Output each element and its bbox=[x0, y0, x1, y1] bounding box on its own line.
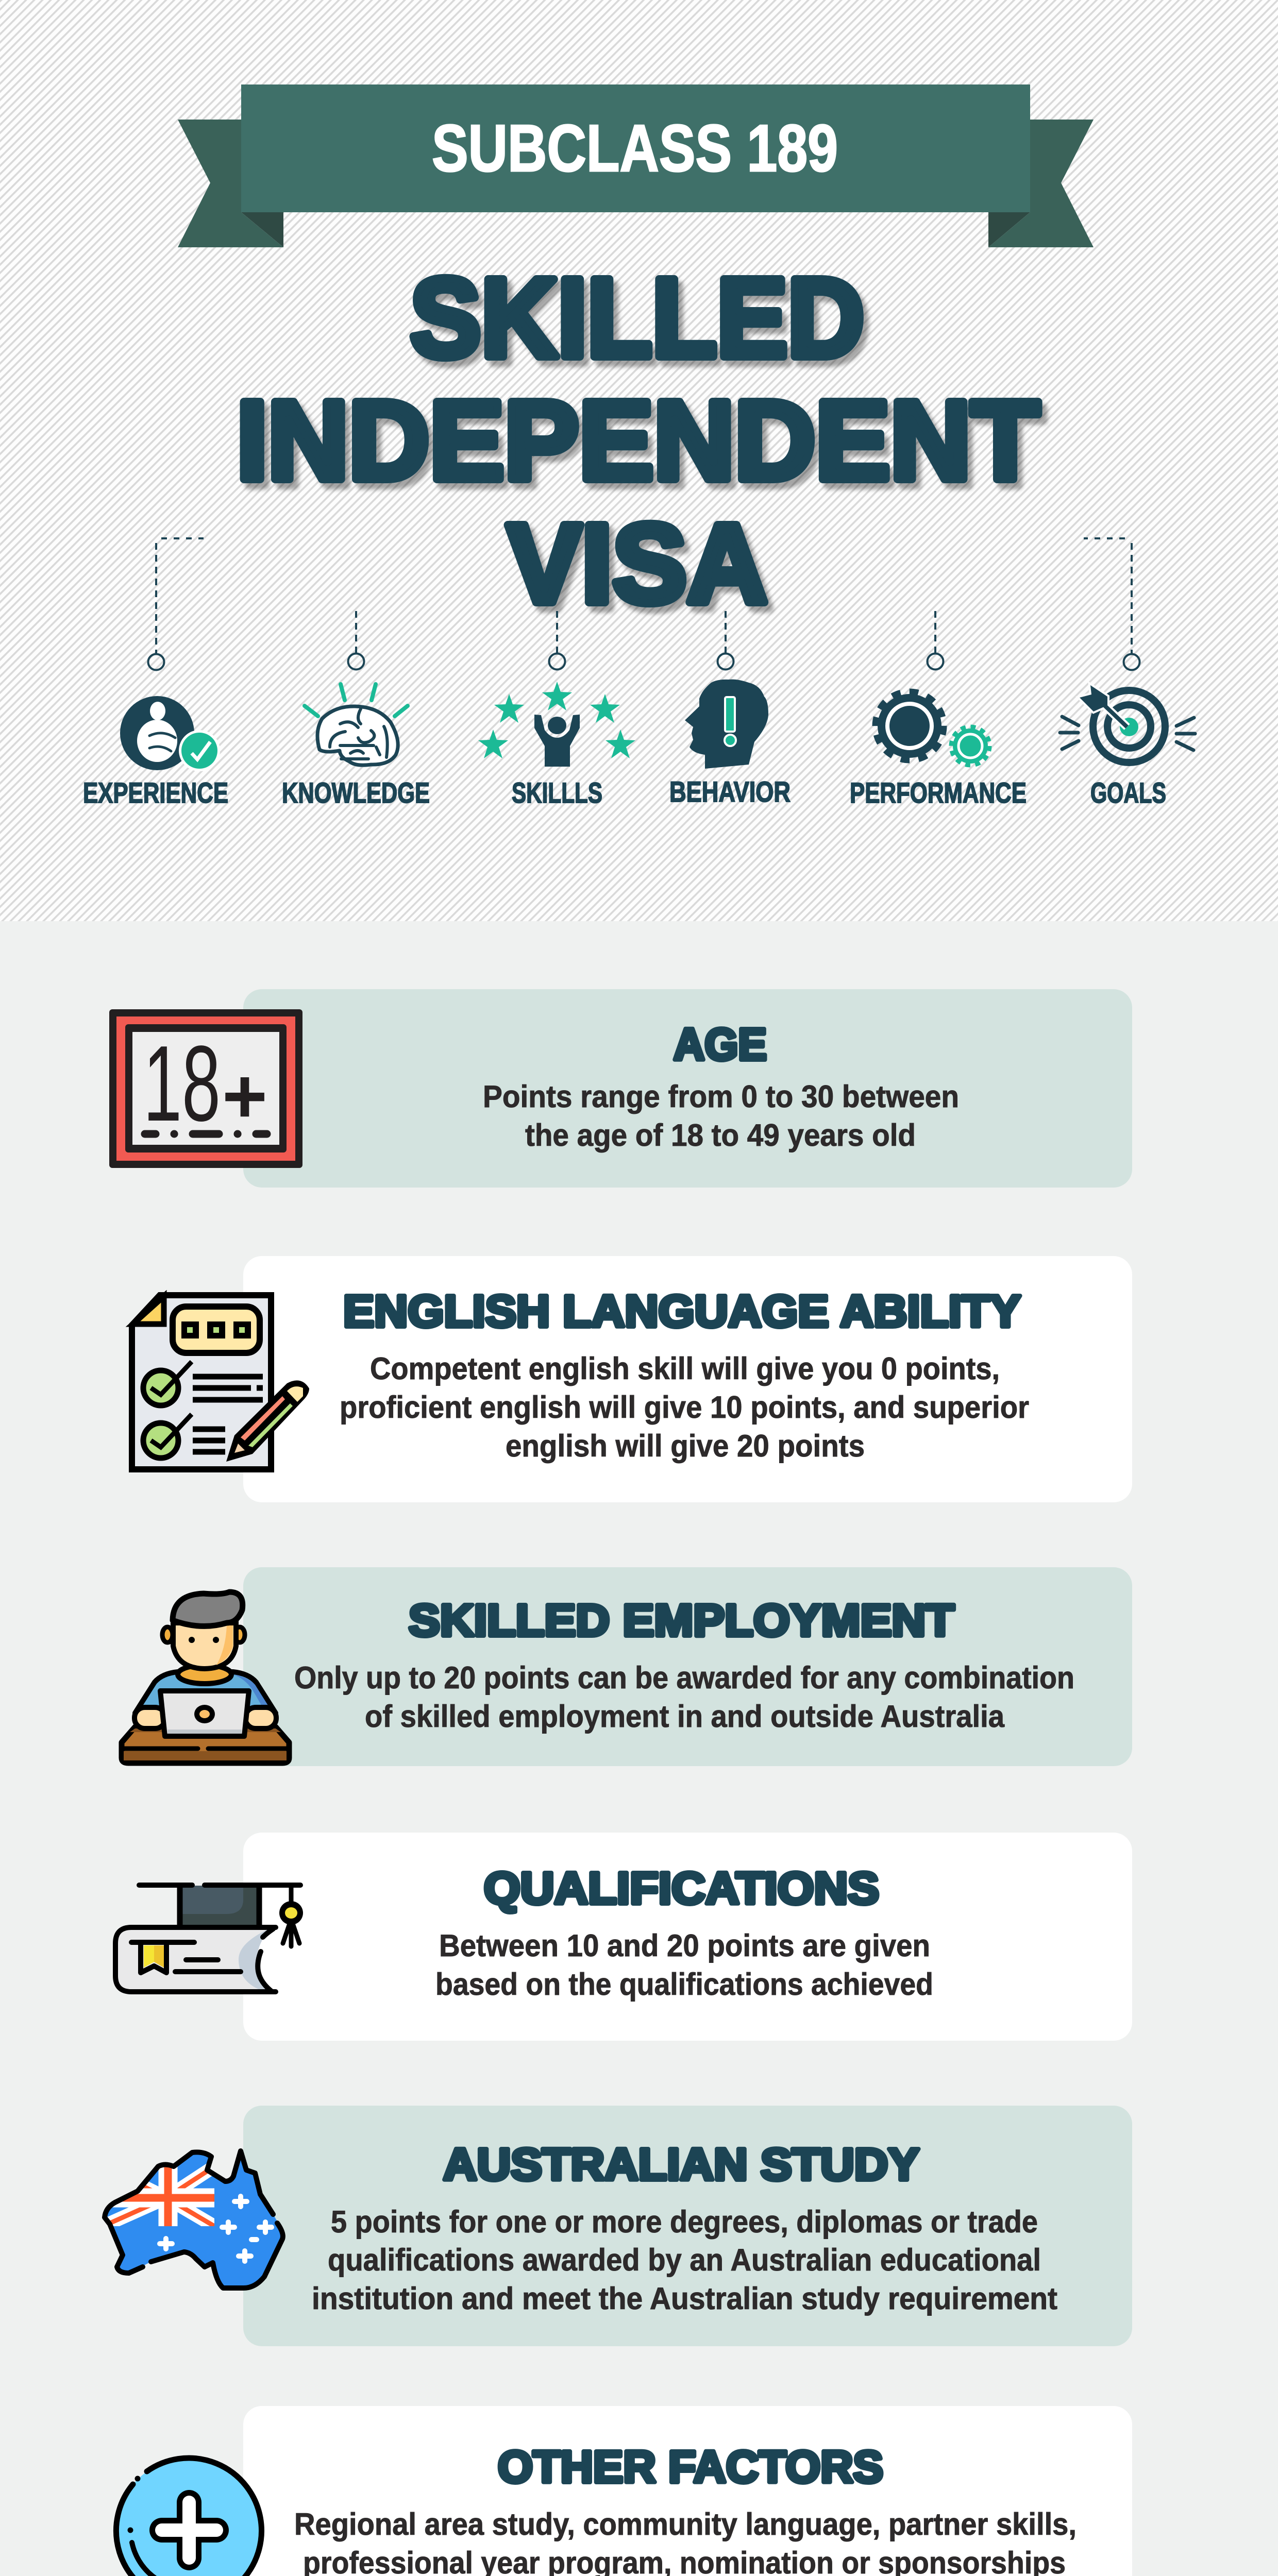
text: english description: english will give 20 points bbox=[506, 1429, 865, 1463]
icon: person at laptop bbox=[122, 1592, 289, 1763]
label: performance: PERFORMANCE bbox=[850, 776, 1027, 809]
icon: goals target bbox=[1060, 685, 1195, 762]
text: employment description: Only up to 20 points can be awarded for any combination bbox=[294, 1660, 1074, 1695]
icon: 18 plus sign: 18 bbox=[143, 1024, 221, 1144]
heading: australian study: AUSTRALIAN STUDY bbox=[443, 2140, 919, 2190]
icon: 18 plus sign: + bbox=[222, 1053, 267, 1139]
text: english description bbox=[340, 1351, 1029, 1463]
label: behavior: BEHAVIOR bbox=[669, 775, 791, 808]
text: english description: proficient english will give 10 points, and superior bbox=[340, 1390, 1029, 1425]
text: age description: Points range from 0 to 30 between bbox=[483, 1079, 959, 1114]
icon: document and pencil bbox=[132, 1295, 309, 1469]
icon: experience bbox=[120, 696, 220, 771]
icon: plus circle bbox=[116, 2458, 262, 2576]
panel: other factors bbox=[116, 2406, 1132, 2576]
label: knowledge: KNOWLEDGE bbox=[282, 776, 430, 809]
text: qualifications description: Between 10 and 20 points are given bbox=[439, 1928, 930, 1963]
text: australian study description: qualifications awarded by an Australian educational bbox=[328, 2243, 1041, 2277]
text: australian study description: institution and meet the Australian study requirement bbox=[312, 2281, 1057, 2316]
icon: knowledge brain bbox=[305, 684, 408, 765]
label: goals: GOALS bbox=[1090, 776, 1166, 809]
icon: australia flag map bbox=[98, 2148, 283, 2288]
title: SKILLED bbox=[410, 256, 864, 381]
title: VISA bbox=[507, 501, 767, 626]
text: qualifications description: based on the qualifications achieved bbox=[435, 1967, 933, 2002]
text: english description: Competent english skill will give you 0 points, bbox=[370, 1351, 1000, 1386]
panel: header background bbox=[0, 0, 1278, 921]
heading: age: AGE bbox=[674, 1020, 767, 1070]
banner label: SUBCLASS 189 bbox=[432, 111, 838, 185]
label: experience: EXPERIENCE bbox=[83, 776, 228, 809]
panel: skilled employment bbox=[122, 1567, 1132, 1766]
heading: other factors: OTHER FACTORS bbox=[498, 2442, 883, 2492]
panel: qualifications bbox=[115, 1833, 1132, 2041]
panel: age bbox=[109, 989, 1132, 1188]
label: skills: SKILLLS bbox=[512, 776, 602, 809]
text: qualifications description bbox=[435, 1928, 933, 2002]
panel: points body background bbox=[0, 921, 1278, 2576]
text: age description: the age of 18 to 49 years old bbox=[525, 1118, 916, 1153]
title bbox=[237, 256, 1039, 626]
icon: graduation cap on book bbox=[115, 1885, 303, 1992]
text: employment description bbox=[294, 1660, 1074, 1734]
title: INDEPENDENT bbox=[237, 378, 1039, 503]
text: australian study description bbox=[312, 2205, 1057, 2316]
connector: performance bbox=[928, 611, 943, 670]
panel: australian study bbox=[98, 2106, 1132, 2346]
text: australian study description: 5 points for one or more degrees, diplomas or trade bbox=[331, 2205, 1038, 2239]
icon: behavior head bbox=[685, 680, 768, 769]
connector: experience bbox=[148, 538, 204, 670]
heading: english language ability: ENGLISH LANGUAGE ABILITY bbox=[343, 1286, 1021, 1336]
panel: english language ability bbox=[132, 1256, 1132, 1502]
icon: skills stars and person bbox=[478, 682, 635, 767]
connector: skills bbox=[549, 611, 565, 670]
text: other factors description bbox=[294, 2507, 1077, 2576]
text: age description bbox=[483, 1079, 959, 1153]
text: employment description: of skilled employment in and outside Australia bbox=[365, 1699, 1005, 1734]
connector: knowledge bbox=[348, 611, 364, 670]
heading: qualifications: QUALIFICATIONS bbox=[484, 1863, 879, 1913]
ribbon banner bbox=[178, 84, 1094, 247]
text: other factors description: Regional area study, community language, partner skills, bbox=[294, 2507, 1077, 2541]
heading: skilled employment: SKILLED EMPLOYMENT bbox=[409, 1596, 954, 1646]
icon: performance gears bbox=[876, 692, 989, 765]
icon: 18 plus sign bbox=[109, 1009, 302, 1168]
connector: behavior bbox=[717, 611, 734, 670]
connector: goals bbox=[1084, 538, 1140, 670]
